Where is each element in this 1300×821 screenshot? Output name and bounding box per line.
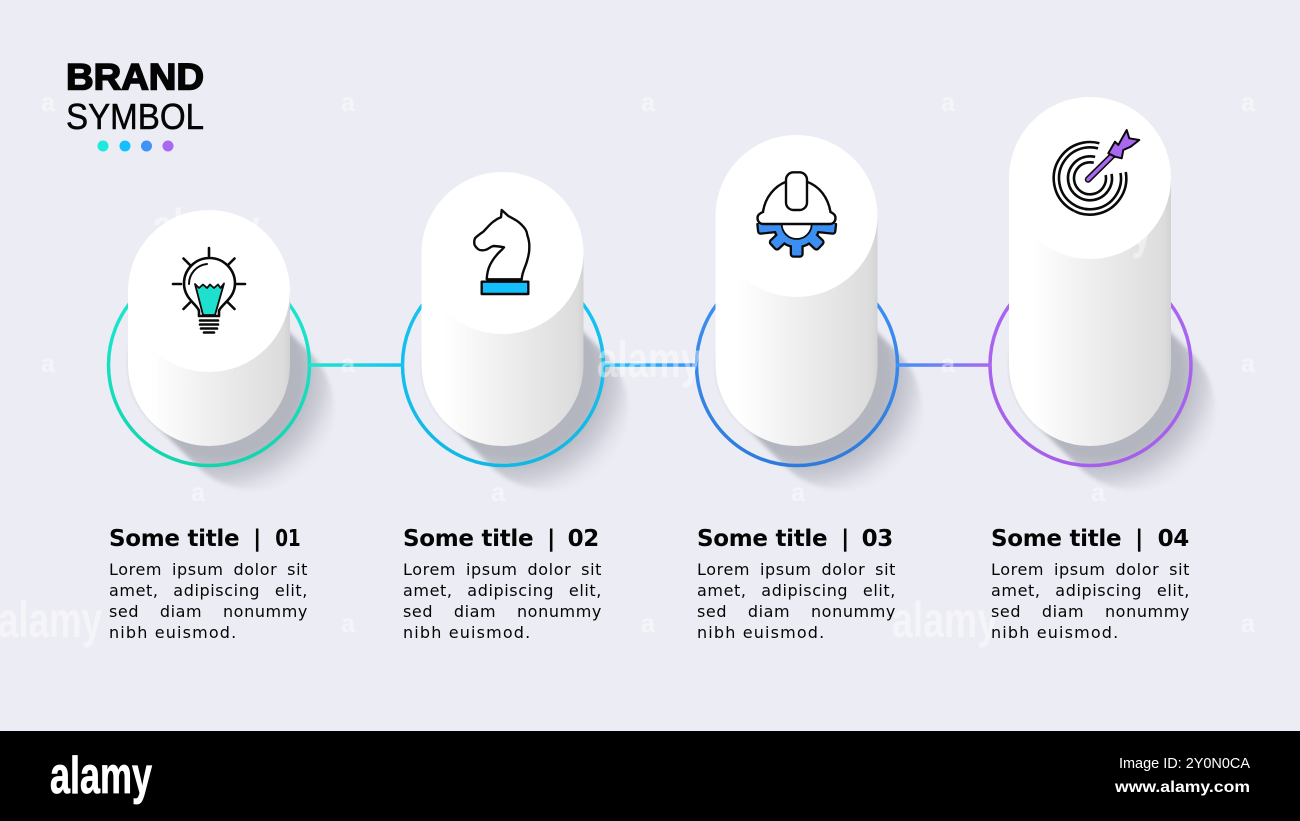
watermark pattern: a <box>791 477 806 507</box>
watermark pattern: a <box>1241 348 1256 378</box>
pillar 4 <box>990 97 1191 466</box>
watermark pattern: a <box>41 87 56 117</box>
watermark pattern: alamy <box>152 199 260 255</box>
title 2: 02 <box>568 526 599 552</box>
watermark pattern <box>0 87 1256 648</box>
watermark pattern: a <box>341 608 356 638</box>
title 1: 01 <box>275 526 300 552</box>
watermark pattern: a <box>1241 608 1256 638</box>
body 3: sed diam nonummy <box>697 602 896 621</box>
pillar 4 shadow <box>1090 365 1135 410</box>
footer bar <box>0 731 1300 821</box>
title 1 <box>109 526 300 552</box>
pillar 3 ring <box>696 264 898 466</box>
pillar 2 ring <box>402 264 604 466</box>
icon: target with arrow <box>1048 130 1139 220</box>
title 4: | <box>1135 526 1143 552</box>
title 3: | <box>841 526 849 552</box>
body 4: sed diam nonummy <box>991 602 1190 621</box>
body 3: nibh euismod. <box>697 622 825 642</box>
image id: Image ID: 2Y0N0CA <box>1119 755 1250 772</box>
body 2 <box>403 560 602 642</box>
icon: helmet and gear <box>758 172 836 256</box>
body 2: Lorem ipsum dolor sit <box>403 560 602 579</box>
watermark pattern: a <box>341 348 356 378</box>
body 1: Lorem ipsum dolor sit <box>109 560 308 579</box>
body 4: nibh euismod. <box>991 622 1119 642</box>
watermark pattern: a <box>941 348 956 378</box>
pillar 3 top <box>716 135 878 297</box>
title 1: Some title <box>109 526 239 552</box>
title 3: Some title <box>697 526 827 552</box>
connector 1 to 2 <box>309 363 404 367</box>
text block 4 <box>991 526 1190 642</box>
watermark pattern: alamy <box>597 332 701 388</box>
body 2: nibh euismod. <box>403 622 531 642</box>
website: www.alamy.com <box>1114 779 1250 796</box>
icon: chess knight <box>474 210 529 294</box>
icon: light bulb <box>173 248 245 332</box>
pillar 2 top <box>422 172 584 334</box>
pillar 3 shadow <box>797 365 842 410</box>
watermark pattern: alamy <box>0 592 102 648</box>
body 3 <box>697 560 896 642</box>
watermark pattern: a <box>941 87 956 117</box>
pillar 4 top <box>1009 97 1171 259</box>
watermark pattern: a <box>491 477 506 507</box>
title 1: | <box>253 526 261 552</box>
pillar 2 <box>402 172 604 466</box>
body 1: amet, adipiscing elit, <box>109 581 308 600</box>
brand word: BRAND <box>66 56 204 98</box>
footer logo: alamy <box>50 747 152 805</box>
body 3: amet, adipiscing elit, <box>697 581 896 600</box>
watermark pattern: alamy <box>1046 203 1152 259</box>
title 3: 03 <box>862 526 893 552</box>
body 1: sed diam nonummy <box>109 602 308 621</box>
pillar 1 <box>108 210 310 466</box>
pillar 1 top <box>128 210 290 372</box>
watermark pattern: a <box>41 348 56 378</box>
body 4: amet, adipiscing elit, <box>991 581 1190 600</box>
title 4: Some title <box>991 526 1121 552</box>
pillar 4 ring <box>990 264 1191 466</box>
connector 2 to 3 <box>603 363 698 367</box>
watermark pattern: a <box>191 477 206 507</box>
connector 3 to 4 <box>896 363 991 367</box>
watermark pattern: a <box>641 87 656 117</box>
brand logo <box>66 56 204 152</box>
body 2: sed diam nonummy <box>403 602 602 621</box>
title 3 <box>697 526 893 552</box>
pillar 4 body <box>1009 178 1171 446</box>
symbol word: SYMBOL <box>66 96 204 137</box>
watermark pattern: a <box>341 87 356 117</box>
body 1: nibh euismod. <box>109 622 237 642</box>
watermark pattern: alamy <box>892 592 998 648</box>
title 2: | <box>547 526 555 552</box>
pillar 3 body <box>716 216 878 446</box>
watermark pattern: a <box>1241 87 1256 117</box>
text block 2 <box>403 526 602 642</box>
body 1 <box>109 560 308 642</box>
pillar 1 shadow <box>209 365 254 410</box>
pillar 3 <box>696 135 898 466</box>
pillar 1 ring <box>108 264 310 466</box>
title 2 <box>403 526 599 552</box>
title 4 <box>991 526 1189 552</box>
pillar 2 shadow <box>503 365 548 410</box>
pillar 2 body <box>422 253 584 446</box>
watermark pattern: a <box>641 608 656 638</box>
logo dots <box>98 140 174 152</box>
body 4: Lorem ipsum dolor sit <box>991 560 1190 579</box>
title 4: 04 <box>1158 526 1189 552</box>
body 2: amet, adipiscing elit, <box>403 581 602 600</box>
text block 1 <box>109 526 308 642</box>
body 4 <box>991 560 1190 642</box>
body 3: Lorem ipsum dolor sit <box>697 560 896 579</box>
title 2: Some title <box>403 526 533 552</box>
pillar 1 body <box>128 291 290 446</box>
text block 3 <box>697 526 896 642</box>
watermark pattern: a <box>1091 477 1106 507</box>
